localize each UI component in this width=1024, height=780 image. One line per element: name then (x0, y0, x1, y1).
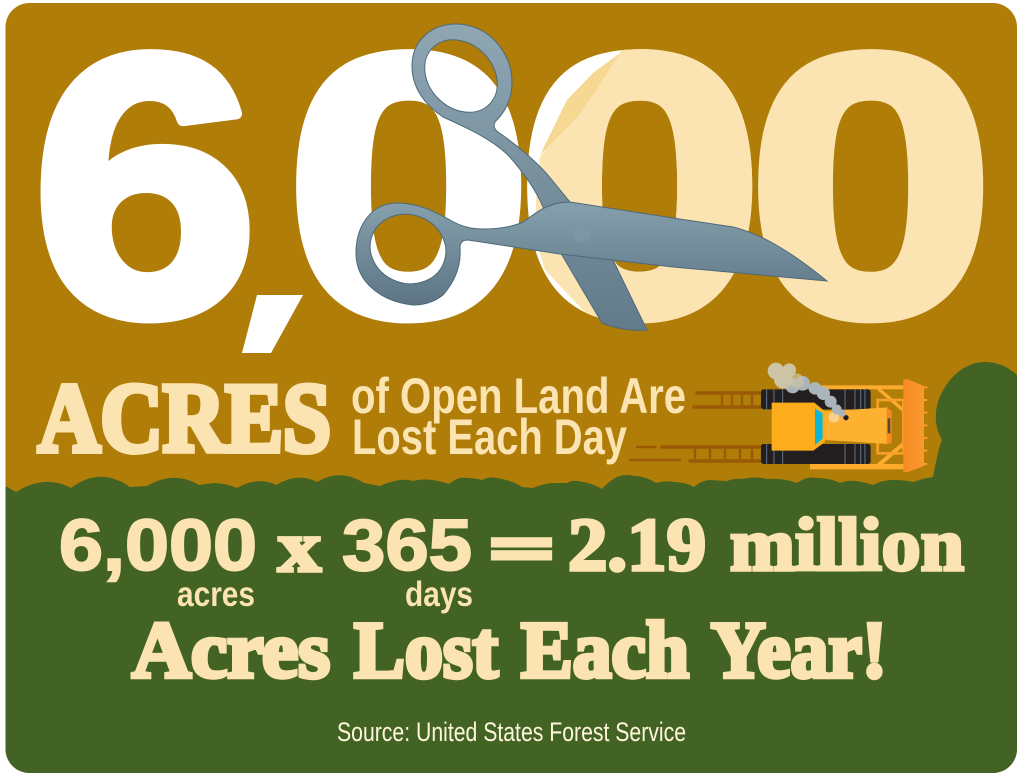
scissors pivot screw (573, 226, 590, 242)
source line: Source: United States Forest Service (337, 717, 686, 747)
equation: times: x (278, 507, 321, 587)
big number 6,000 (40, 49, 984, 353)
heading: ACRES: ACRES (38, 364, 331, 473)
heading: Lost Each Day: Lost Each Day (352, 409, 627, 465)
icon: dirt tracks (630, 393, 760, 461)
equation: 2.19: 2.19 (568, 504, 706, 587)
bulldozer exhaust (829, 412, 839, 423)
bulldozer tracks (761, 389, 871, 464)
label: acres: acres (177, 575, 255, 614)
heading: of Open Land Are: of Open Land Are (351, 368, 686, 424)
bulldozer smoke (768, 363, 846, 417)
bulldozer windshield (815, 408, 823, 445)
bulldozer blade teeth (923, 387, 927, 464)
equation: 365: 365 (342, 506, 472, 586)
bulldozer cab (772, 403, 825, 451)
scissors upper blade and lower handle (356, 202, 827, 305)
bulldozer blade (903, 379, 924, 472)
heading: Acres Lost Each Year!: Acres (132, 607, 330, 695)
bulldozer frame (810, 385, 907, 469)
icon: bulldozer (761, 363, 927, 472)
heading: Acres Lost Each Year!: Year! (711, 607, 887, 695)
heading: Acres Lost Each Year!: Lost (354, 607, 498, 695)
heading: Acres Lost Each Year! (132, 607, 887, 695)
icon: scissors (356, 24, 827, 330)
bulldozer grille (887, 407, 892, 445)
scissors lower blade and top handle (412, 24, 647, 330)
panel: green ground with bushes (5, 362, 1017, 773)
label: days: days (405, 575, 473, 614)
equation: million: million (730, 504, 964, 587)
peel fold (540, 53, 620, 155)
equation: 6,000: 6,000 (59, 506, 257, 586)
heading: Acres Lost Each Year!: Each (521, 607, 689, 695)
equation: equals: = (492, 523, 551, 576)
bulldozer hood (823, 407, 888, 444)
